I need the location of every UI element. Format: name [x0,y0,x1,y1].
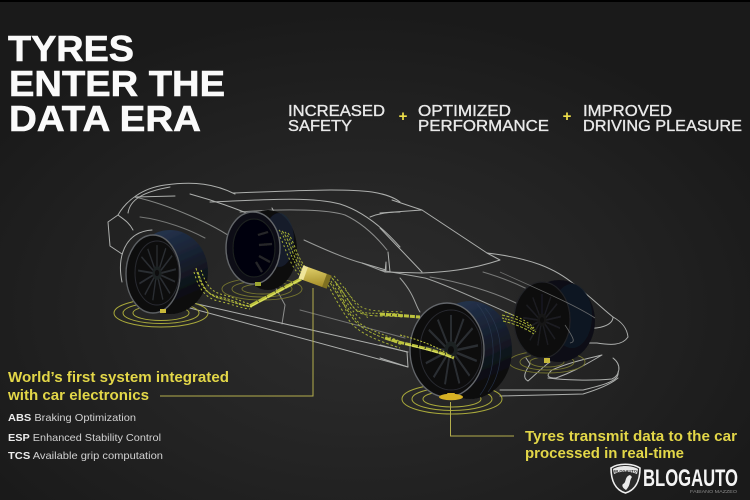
sensor rings: front right [509,351,585,373]
benefit: improved driving pleasure: DRIVING PLEASURE [583,118,742,135]
wheel: rear left [126,230,208,314]
title: ENTER THE [9,63,225,104]
plus sign: + [399,108,408,125]
data stream: sensor module to front wheels [326,276,454,358]
sensor: front left tyre [439,393,463,400]
item: ABS: ABS Braking Optimization [8,412,136,424]
tagline: FABIANO MAZZEO [690,489,738,494]
item: TCS: TCS Available grip computation [8,450,163,462]
wheel: rear right [226,210,297,290]
wheel: front left [410,301,512,399]
benefit: increased safety [288,103,385,135]
item: ESP: ESP Enhanced Stability Control [8,432,161,444]
benefit: increased safety: SAFETY [288,118,352,135]
benefit: optimized performance [418,103,549,135]
callout: real-time data [525,428,737,462]
data stream: rear right wheel to sensor module [279,230,310,276]
sensor: front right tyre [544,358,550,363]
title [8,28,225,139]
sensor rings: front left [402,384,502,414]
sensor: rear right tyre [255,282,261,286]
logo: BlogAuto [611,464,738,494]
title: TYRES [8,28,134,69]
data stream: rear left wheel to sensor module [194,268,301,309]
icon: shield: BLOGAUTO [614,468,637,474]
sensor rings: rear right [222,278,302,300]
benefit: improved driving pleasure: IMPROVED [583,103,672,120]
callout: system integration [7,369,229,404]
car lines over wheel [500,272,595,343]
wheel: front right [500,272,595,362]
data stream: between front wheels [502,312,536,334]
list: electronic systems [8,412,163,462]
callout: system integration: with car electronics [7,387,149,404]
callout line: tyre sensor [450,402,514,436]
benefit: improved driving pleasure [583,103,742,135]
sensor rings: rear left [114,299,208,327]
plus sign: + [563,108,572,125]
benefit: optimized performance: PERFORMANCE [418,118,549,135]
callout: real-time data: Tyres transmit data to the car [525,428,737,445]
benefit: optimized performance: OPTIMIZED [418,103,511,120]
callout line: sensor module [160,288,313,396]
callout: system integration: World’s first system integrated [8,369,229,386]
callout: real-time data: processed in real-time [525,445,684,462]
title: DATA ERA [9,98,201,139]
sensor module [299,265,331,289]
car outline [108,183,628,396]
benefit: increased safety: INCREASED [288,103,385,120]
sensor: rear left tyre [160,309,166,313]
benefits header [288,103,742,135]
